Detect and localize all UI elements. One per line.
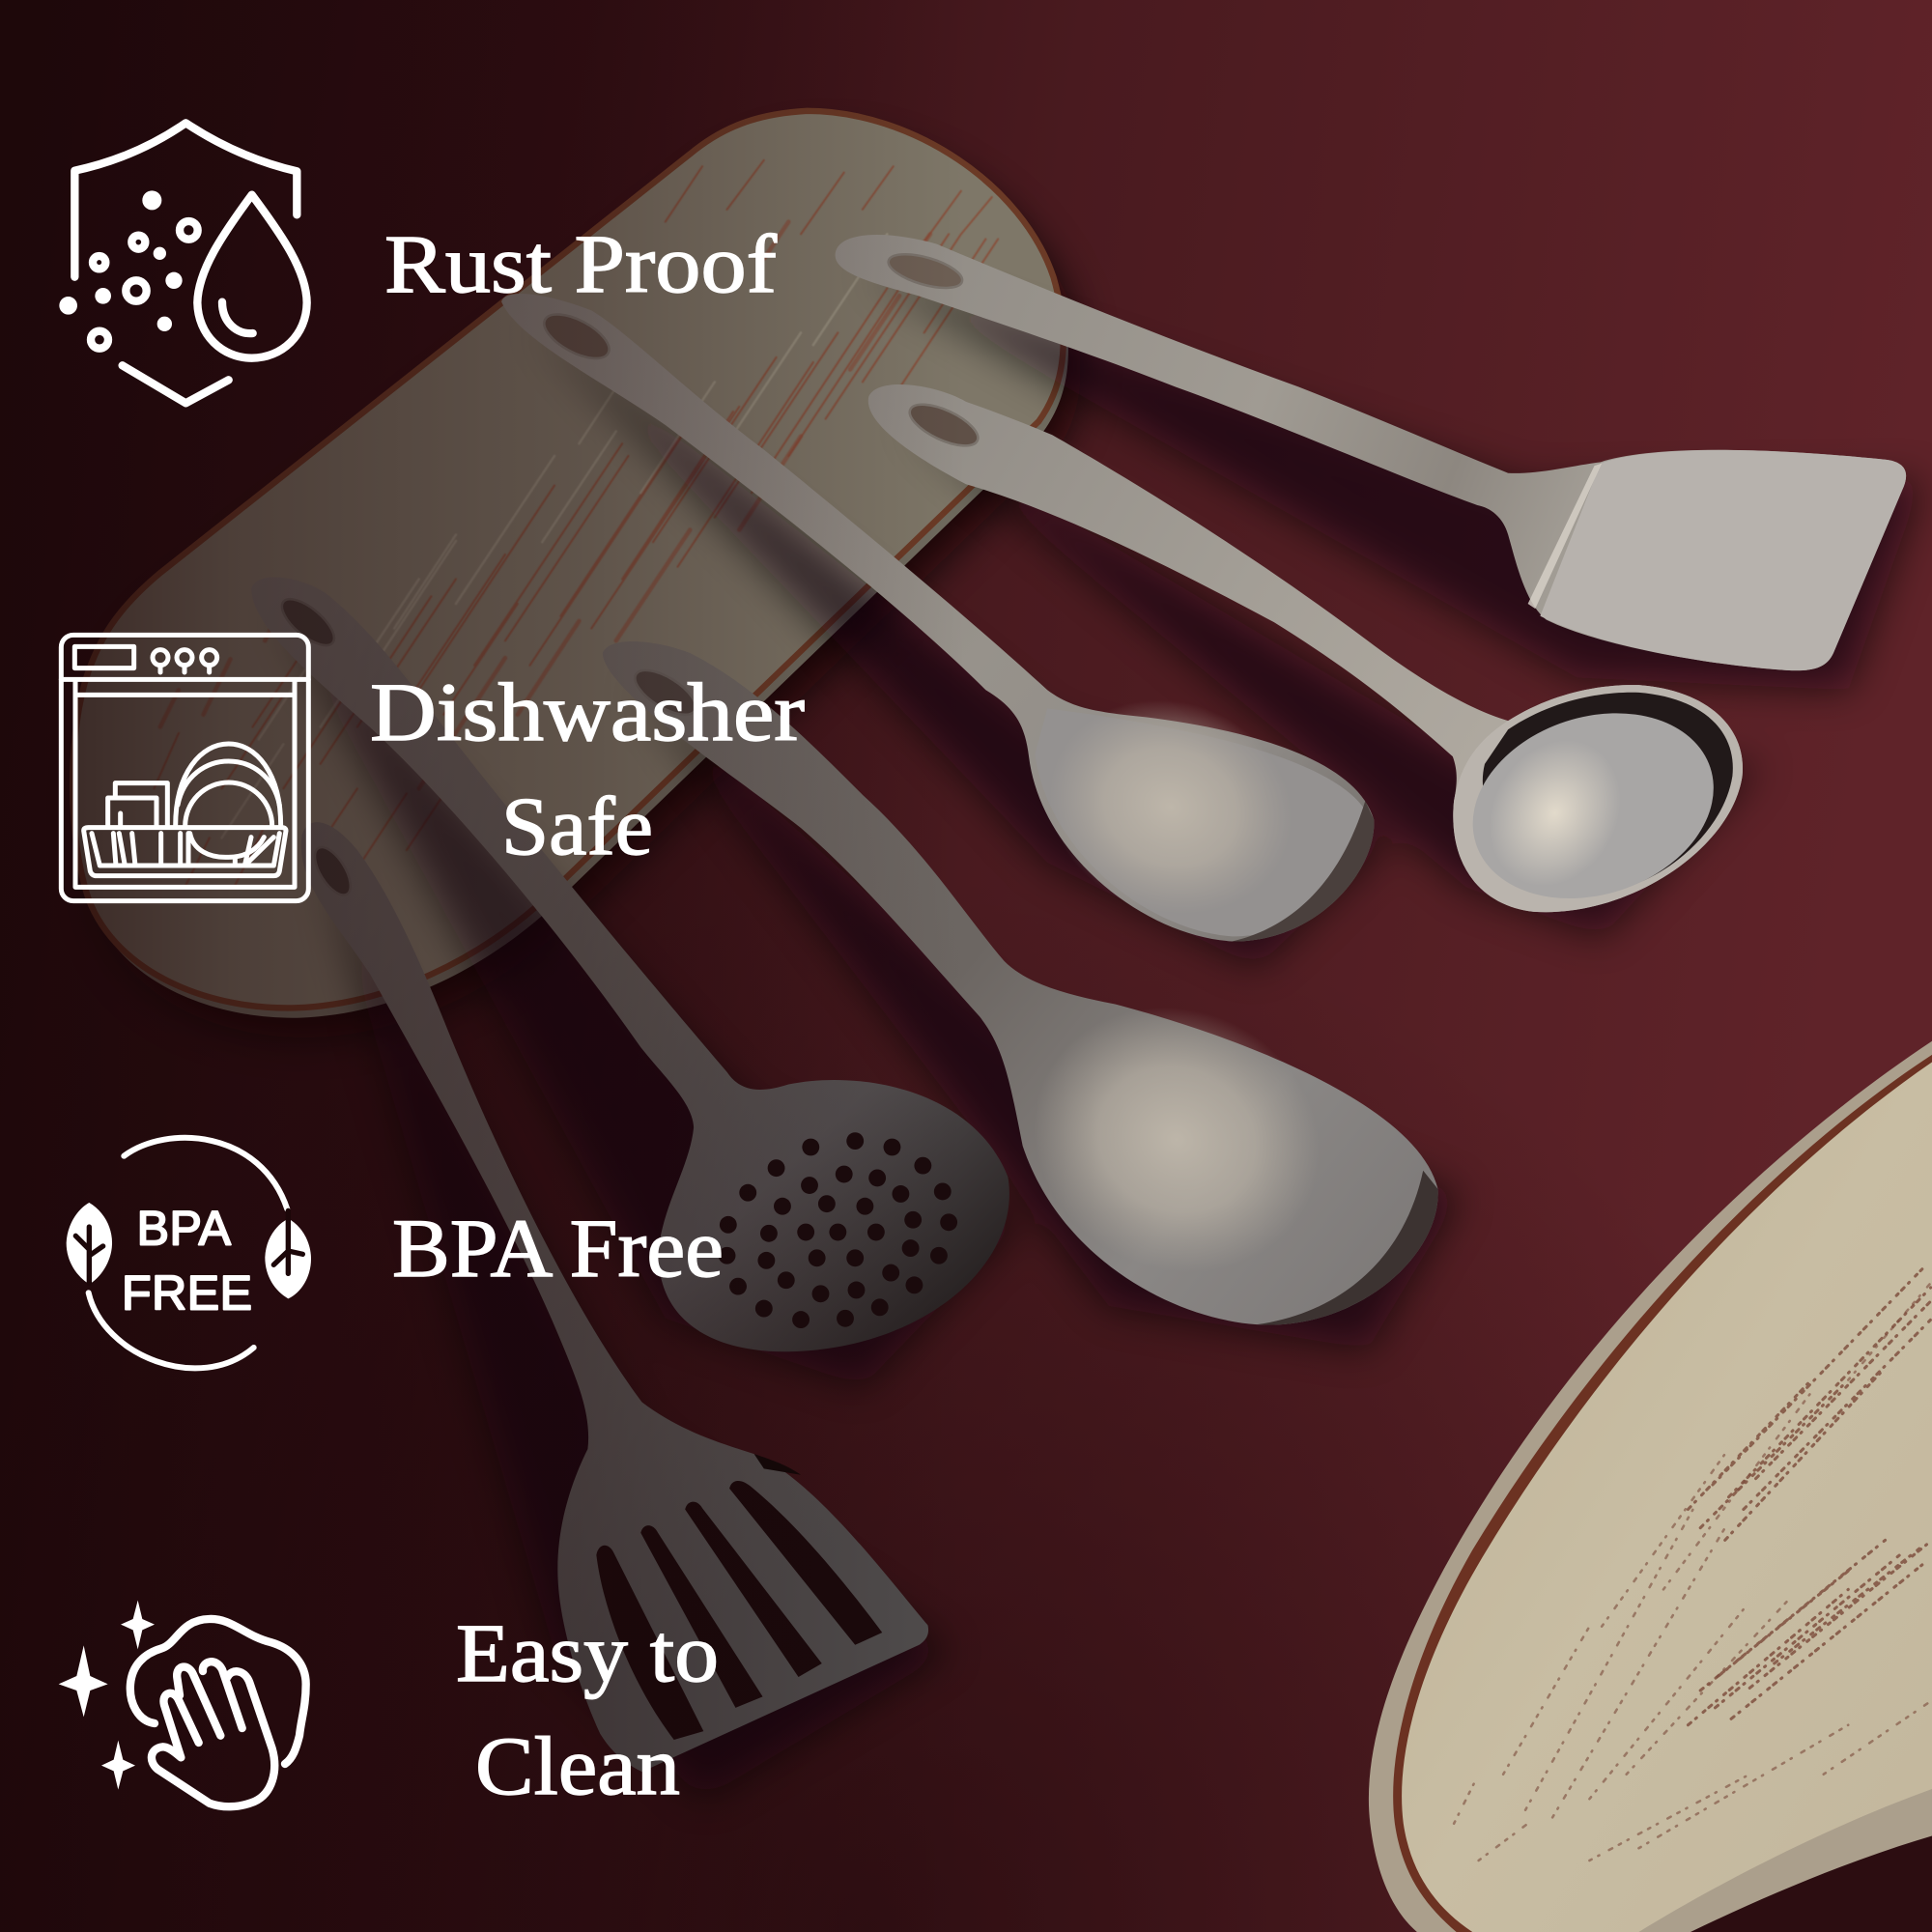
feature: easy to clean: Clean <box>475 1719 680 1812</box>
icon: dishwasher <box>61 635 308 901</box>
heading: dishwasher safe: Dishwasher <box>370 666 805 758</box>
plate: bottom right <box>1369 1041 1932 1932</box>
icon: hand wiping with sparkles <box>59 1601 306 1806</box>
utensil: skimmer <box>251 578 1009 1351</box>
heading: rust proof: Rust Proof <box>384 217 777 310</box>
feature: rust proof <box>59 123 777 403</box>
heading: bpa free: BPA Free <box>392 1202 724 1294</box>
icon: bpa free leaves: FREE <box>122 1266 252 1321</box>
feature: dishwasher safe: Safe <box>501 780 653 872</box>
icon: shield with water drop <box>59 123 307 403</box>
utensil: solid turner <box>836 235 1906 670</box>
feature: easy to clean <box>59 1601 719 1812</box>
feature: bpa free <box>67 1138 724 1368</box>
utensil: serving spoon <box>501 294 1374 948</box>
utensil: slotted turner <box>301 822 928 1772</box>
plate: top left <box>72 111 1081 1037</box>
icon: bpa free leaves <box>67 1138 311 1368</box>
utensil: ladle <box>868 384 1743 928</box>
feature: dishwasher safe <box>61 635 805 901</box>
heading: easy to clean: Easy to <box>456 1606 719 1699</box>
icon: bpa free leaves: BPA <box>137 1201 232 1255</box>
utensil: rice spoon <box>603 641 1438 1325</box>
utensil shadows <box>277 271 1922 1799</box>
